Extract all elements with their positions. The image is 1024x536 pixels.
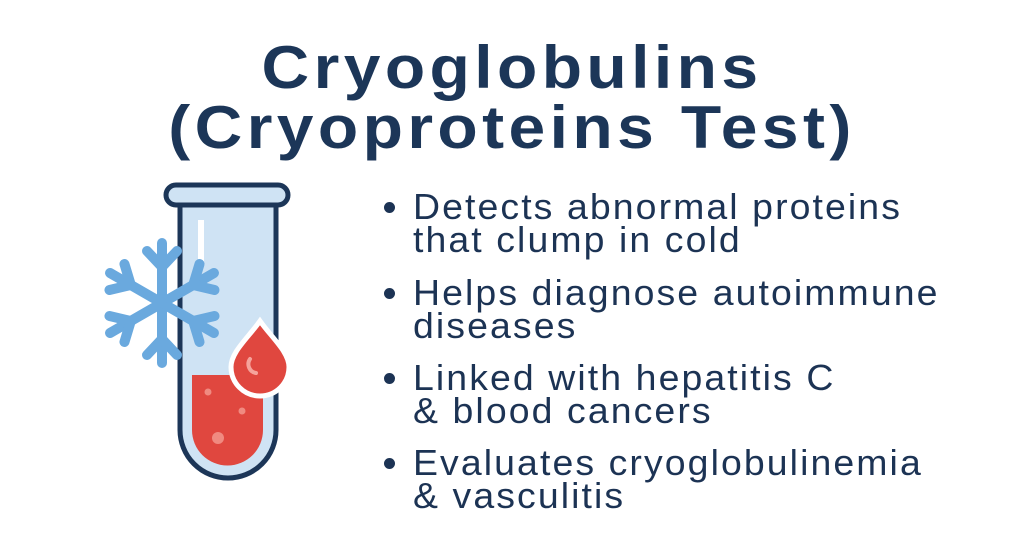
- bullet 4: [384, 442, 923, 516]
- bullet 4: & vasculitis: [413, 475, 625, 516]
- bullet 4: Evaluates cryoglobulinemia: [413, 442, 923, 483]
- bullet 3: & blood cancers: [413, 390, 713, 431]
- icon: test tube with snowflake and blood drop: [104, 182, 290, 480]
- bullet 2: diseases: [413, 305, 577, 346]
- bullet 1: that clump in cold: [413, 219, 742, 260]
- tube body: [166, 185, 288, 478]
- bullet 3: [384, 357, 835, 431]
- icon: blood drop: [231, 321, 289, 396]
- bullet 1: [384, 186, 902, 260]
- bullet 2: [384, 272, 940, 346]
- bullet 1: Detects abnormal proteins: [413, 186, 902, 227]
- title: [168, 34, 856, 161]
- title: (Cryoproteins Test): [168, 94, 856, 161]
- bullet 3: Linked with hepatitis C: [413, 357, 835, 398]
- bullet 2: Helps diagnose autoimmune: [413, 272, 940, 313]
- icon: snowflake: [103, 243, 221, 363]
- title: Cryoglobulins: [262, 34, 762, 101]
